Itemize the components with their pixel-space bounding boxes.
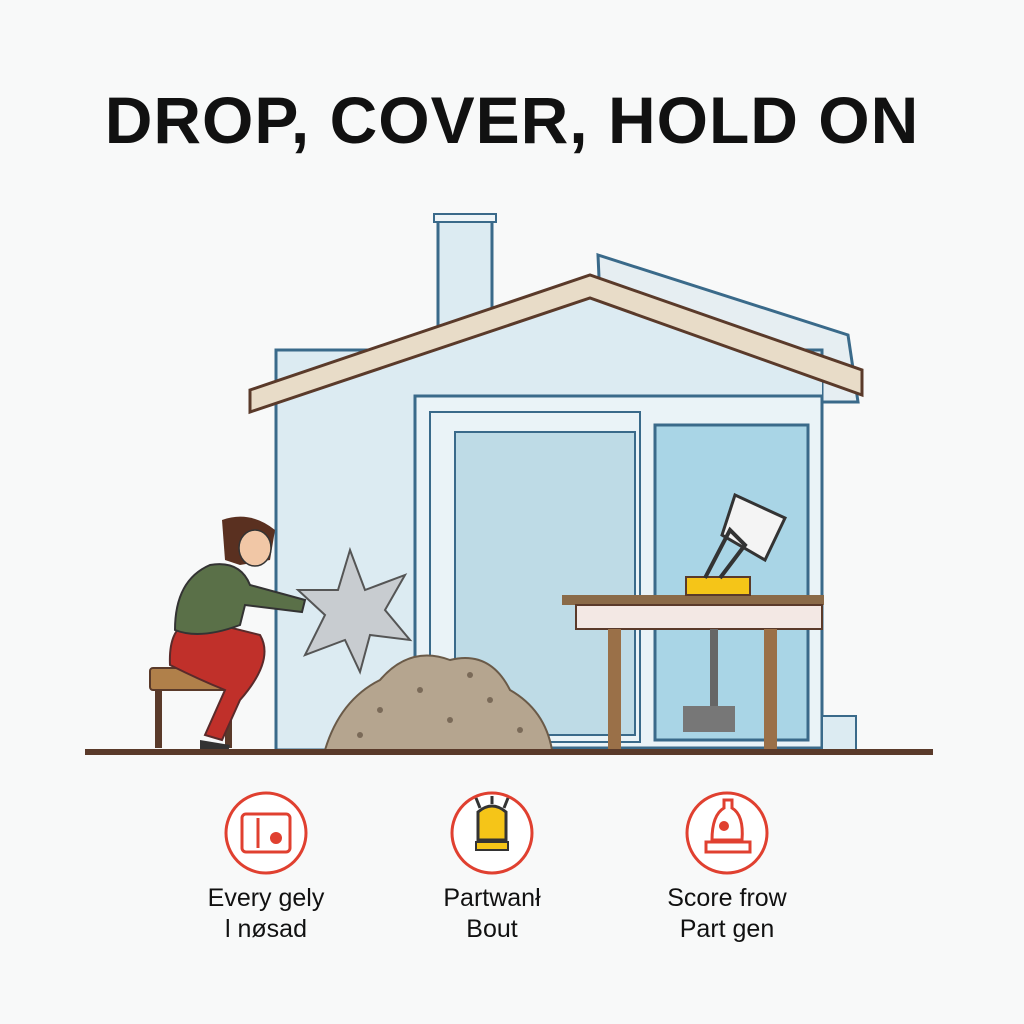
label 3: Part gen <box>680 915 774 943</box>
title: DROP, COVER, HOLD ON <box>105 83 919 157</box>
label 1: Every gely <box>208 884 324 912</box>
label 2: Partwanł <box>443 884 541 912</box>
label 3 <box>667 884 787 943</box>
table <box>562 595 824 749</box>
label 1: l nøsad <box>225 915 307 943</box>
person <box>170 517 305 752</box>
debris pile <box>325 656 552 750</box>
label 1 <box>208 884 324 943</box>
chimney <box>434 214 496 326</box>
roof <box>250 275 862 412</box>
back roof <box>598 255 858 402</box>
icon 2 <box>452 793 532 873</box>
falling debris star <box>298 550 410 672</box>
door frame <box>415 396 856 750</box>
ground line <box>85 749 933 755</box>
label 3: Score frow <box>667 884 787 912</box>
icon 3 <box>687 793 767 873</box>
stool <box>150 668 238 748</box>
object on table <box>686 495 785 595</box>
label 2: Bout <box>466 915 518 943</box>
wall <box>276 290 822 750</box>
icon 1 <box>226 793 306 873</box>
label 2 <box>443 884 541 943</box>
